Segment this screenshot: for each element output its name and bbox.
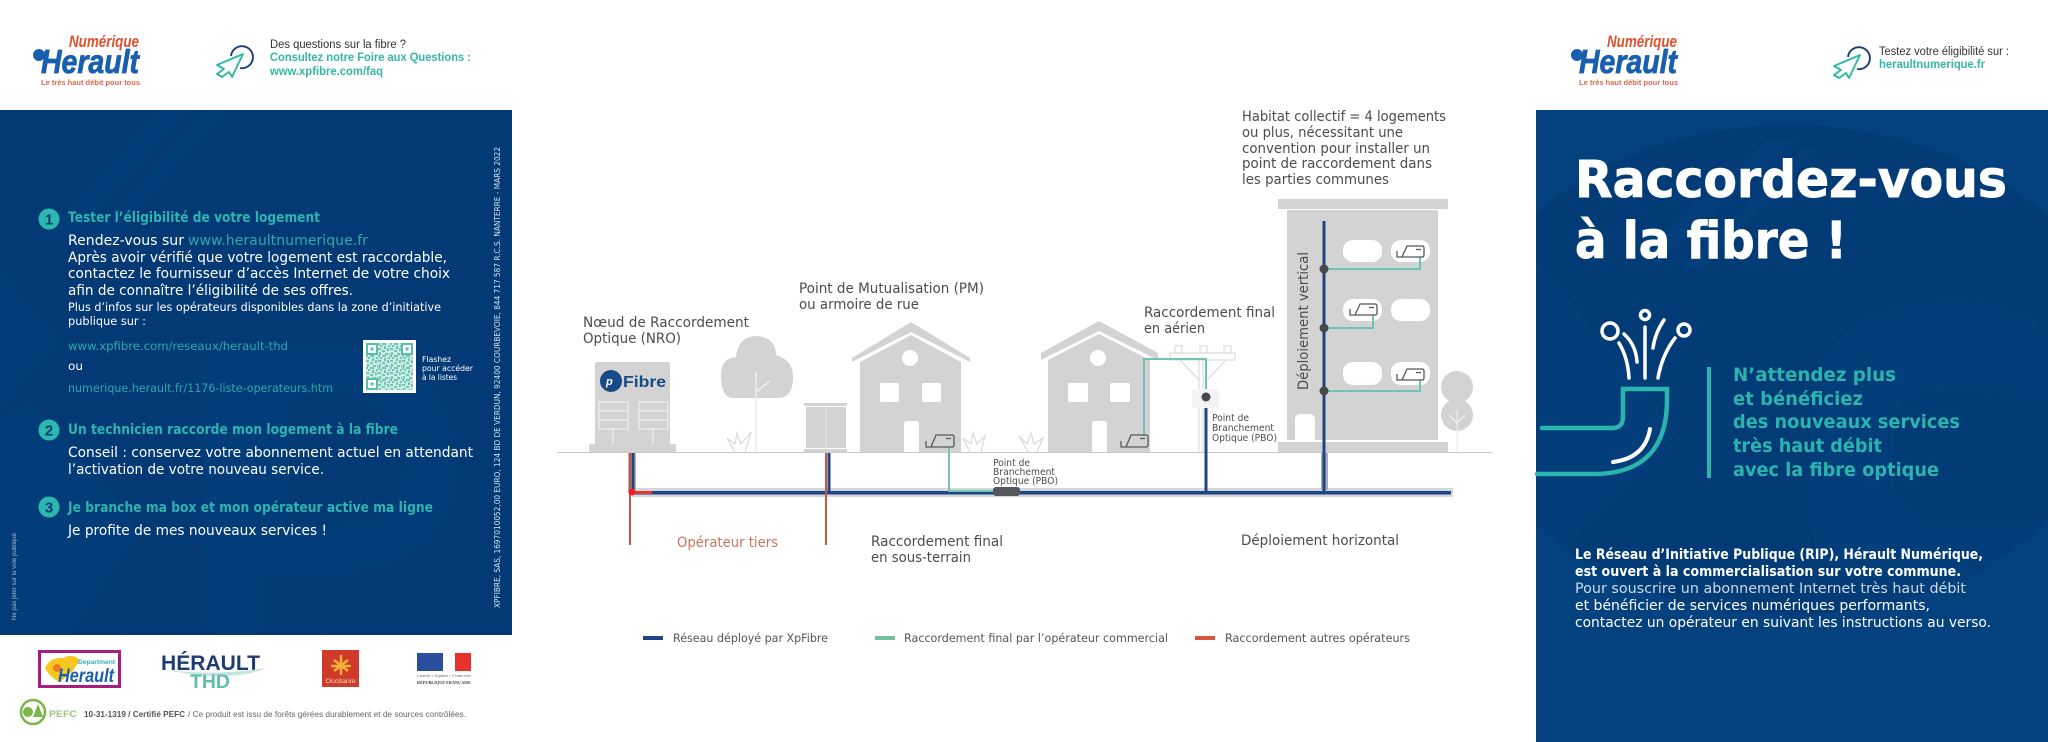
eligibility text block: Testez votre éligibilité sur : (1879, 46, 2009, 58)
label: PBO underground: Branchement (993, 467, 1055, 478)
final connection lines (949, 257, 1420, 491)
header logo: Numérique Hérault (recto): Herault (1579, 43, 1679, 80)
divider (1707, 367, 1711, 478)
tree (721, 336, 793, 452)
junction PBO underground (993, 487, 1020, 496)
step 1: numerique.herault.fr/1176-liste-operateurs.htm (68, 381, 333, 395)
description text: est ouvert à la commercialisation sur votre commune. (1575, 564, 1961, 580)
logo: Hérault THD (161, 652, 266, 693)
header logo: Numérique Hérault (recto): Numérique (1607, 32, 1677, 51)
QR caption: Flashez (422, 355, 451, 364)
ground line (557, 452, 1492, 453)
teal tagline: très haut débit (1733, 435, 1882, 457)
legend: Réseau déployé par XpFibre (673, 631, 828, 645)
label: PBO aerial: Optique (PBO) (1212, 433, 1277, 444)
legend (643, 631, 1410, 645)
label: aerial connection: Raccordement final (1144, 305, 1275, 321)
step 1: afin de connaître l’éligibilité de ses offres. (68, 283, 353, 299)
third-party operator lines (628, 453, 827, 545)
panel: steps (verso) (0, 110, 512, 635)
NRO building: p (605, 376, 613, 388)
legal vertical text: XPFIBRE, SAS, 1697010052,00 EURO, 124 BD DE VERDUN, 92400 COURBEVOIE, 844 717 587 R.C.S. NANTERRE - MARS 2022 (493, 147, 502, 608)
label: aerial connection (1144, 305, 1275, 337)
label: PBO aerial: Branchement (1212, 423, 1274, 434)
header logo: Numérique Hérault (verso): Numérique (69, 32, 139, 51)
vertical note: Ne pas jeter sur la voie publique (12, 532, 18, 620)
description text: Pour souscrire un abonnement Internet très haut débit (1575, 581, 1967, 597)
teal tagline (1733, 364, 1960, 481)
label: underground connection: en sous-terrain (871, 550, 971, 566)
step 3: Je branche ma box et mon opérateur active ma ligne (67, 500, 433, 516)
label: PBO aerial (1212, 413, 1277, 444)
label: collective housing: point de raccordement dans (1242, 156, 1432, 172)
NRO building: Fibre (623, 374, 666, 391)
utility pole (1170, 346, 1235, 452)
label: PBO aerial: Point de (1212, 413, 1249, 424)
logo: PEFC certification: PEFC (49, 709, 77, 720)
step 2: Conseil : conservez votre abonnement actuel en attendant (68, 445, 473, 461)
logo: République Française (417, 653, 472, 685)
step 2: Un technicien raccorde mon logement à la fibre (68, 422, 398, 438)
logo: Hérault THD: THD (190, 672, 230, 693)
label: PBO underground: Point de (993, 458, 1030, 469)
FAQ text block: Des questions sur la fibre ? (270, 39, 406, 51)
label: horizontal deployment: Déploiement horizontal (1241, 533, 1399, 549)
step 1 (38, 208, 450, 395)
label: NRO (583, 315, 749, 347)
logo: Région Occitanie: Occitanie (326, 678, 356, 685)
icon: fibre conduit (1537, 310, 1690, 474)
horizontal cable (628, 221, 1453, 497)
step 1: www.heraultnumerique.fr (188, 233, 368, 249)
NRO building (589, 362, 676, 452)
QR caption: à la listes (422, 373, 457, 382)
label: PBO underground (993, 458, 1058, 487)
logo: Hérault THD: HÉRAULT (161, 652, 260, 675)
subscriber terminals (926, 246, 1424, 447)
QR caption (422, 355, 474, 382)
vertical nodes (1320, 264, 1328, 396)
street cabinet (PM) (804, 403, 847, 452)
label: collective housing: Habitat collectif = 4 logements (1242, 109, 1446, 125)
header logo: Numérique Hérault (verso): Herault (41, 43, 141, 80)
house 1 (852, 322, 1043, 452)
label: PM: ou armoire de rue (799, 297, 919, 313)
FAQ text block: Consultez notre Foire aux Questions : (270, 52, 471, 64)
label: collective housing: convention pour installer un (1242, 141, 1430, 157)
title: Raccordez-vous (1575, 151, 2007, 210)
step 1: Tester l’éligibilité de votre logement (68, 210, 320, 226)
step 1: contactez le fournisseur d’accès Internet de votre choix (68, 266, 450, 282)
label: underground connection (871, 534, 1003, 566)
logo: République Française: Liberté • Égalité • Fraternité (417, 673, 472, 678)
description text: et bénéficier de services numériques performants, (1575, 598, 1930, 614)
logo: Région Occitanie (322, 650, 359, 687)
eligibility text block (1879, 46, 2009, 71)
step 1: ou (68, 359, 83, 373)
label: NRO: Optique (NRO) (583, 331, 681, 347)
logo: PEFC certification (21, 700, 466, 724)
panel: cover (recto) (1534, 110, 2048, 742)
header logo: Numérique Hérault (verso) (33, 32, 141, 87)
step 2 (38, 420, 473, 478)
step 1: Rendez-vous sur (68, 233, 184, 249)
label: third-party operator: Opérateur tiers (677, 535, 778, 551)
label: PBO underground: Optique (PBO) (993, 476, 1058, 487)
teal tagline: avec la fibre optique (1733, 459, 1939, 481)
step 2: l’activation de votre nouveau service. (68, 462, 324, 478)
step 1: Plus d’infos sur les opérateurs disponibles dans la zone d’initiative (68, 300, 441, 314)
collective building (1278, 199, 1448, 452)
header logo: Numérique Hérault (recto): Le très haut débit pour tous (1579, 78, 1678, 87)
small tree (1441, 371, 1473, 452)
PBO aerial box (1192, 389, 1219, 408)
icon: cursor click (verso) (217, 46, 253, 77)
header logo: Numérique Hérault (recto) (1571, 32, 1679, 87)
step 3: 3 (45, 500, 53, 516)
description text: Le Réseau d’Initiative Publique (RIP), Hérault Numérique, (1575, 547, 1983, 563)
label: aerial connection: en aérien (1144, 321, 1205, 337)
QR caption: pour accéder (422, 364, 474, 373)
step 3 (38, 496, 433, 539)
teal tagline: et bénéficiez (1733, 388, 1863, 410)
diagram: fibre network (557, 109, 1492, 566)
step 1: 1 (45, 212, 53, 228)
label: PM (799, 281, 984, 313)
teal tagline: des nouveaux services (1733, 411, 1960, 433)
logo: Département Hérault (40, 652, 120, 687)
label: NRO: Nœud de Raccordement (583, 315, 749, 331)
logo: Département Hérault: Department (78, 660, 115, 666)
logo: République Française: RÉPUBLIQUE FRANÇAISE (417, 680, 471, 685)
step 1: Après avoir vérifié que votre logement est raccordable, (68, 250, 447, 266)
eligibility text block: heraultnumerique.fr (1879, 59, 1985, 71)
teal tagline: N’attendez plus (1733, 364, 1896, 386)
FAQ text block (269, 39, 471, 78)
house 2 (1041, 321, 1158, 452)
label: PM: Point de Mutualisation (PM) (799, 281, 984, 297)
label: vertical deployment: Déploiement vertical (1296, 252, 1312, 390)
description text: contactez un opérateur en suivant les instructions au verso. (1575, 615, 1991, 631)
title: à la fibre ! (1575, 212, 1847, 271)
step 2: 2 (45, 422, 53, 440)
QR code (363, 340, 416, 393)
logo: PEFC certification: 10-31-1319 / Certifié PEFC (84, 709, 185, 719)
icon: cursor click (recto) (1834, 47, 1870, 78)
label: collective housing: ou plus, nécessitant une (1242, 125, 1403, 141)
step 3: Je profite de mes nouveaux services ! (67, 523, 327, 539)
FAQ text block: www.xpfibre.com/faq (269, 66, 383, 78)
legend: Raccordement final par l’opérateur commercial (904, 631, 1168, 645)
label: underground connection: Raccordement final (871, 534, 1003, 550)
step 1: www.xpfibre.com/reseaux/herault-thd (68, 339, 288, 353)
header logo: Numérique Hérault (verso): Le très haut débit pour tous (41, 78, 140, 87)
label: collective housing: les parties communes (1242, 172, 1389, 188)
legend: Raccordement autres opérateurs (1225, 631, 1410, 645)
description text (1575, 547, 1991, 631)
logo: PEFC certification: / Ce produit est issu de forêts gérées durablement et de sources contrôlées. (188, 709, 466, 719)
label: collective housing (1242, 109, 1446, 188)
logo: Département Hérault: Herault (58, 666, 115, 687)
title (1575, 151, 2007, 271)
step 1: publique sur : (68, 314, 146, 328)
